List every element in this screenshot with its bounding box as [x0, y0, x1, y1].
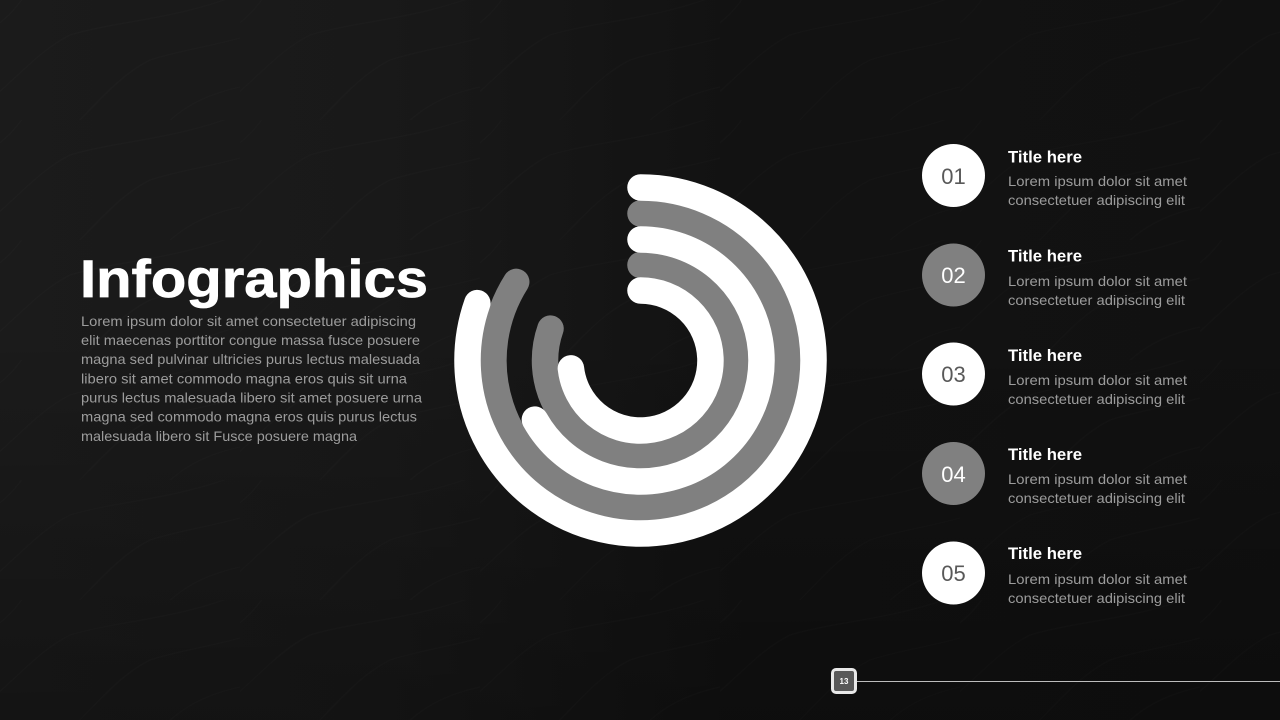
item title 03: Title here: [1008, 346, 1082, 365]
item text 01: Lorem ipsum dolor sit amet: [1008, 173, 1187, 189]
list item 05: [922, 542, 1187, 606]
item title 01: Title here: [1008, 148, 1082, 166]
number badge 01: 01: [941, 164, 966, 189]
item text 02: Lorem ipsum dolor sit amet: [1008, 273, 1187, 289]
text block: intro paragraph: elit maecenas porttitor congue massa fusce posuere: [81, 332, 420, 348]
number badge 05: [922, 542, 985, 604]
radial bar 03: [535, 240, 761, 482]
item text 01: [1008, 173, 1187, 208]
number badge 05: 05: [941, 561, 966, 586]
text block: intro paragraph: malesuada libero sit Fusce posuere magna: [81, 428, 357, 444]
number badge 03: [922, 342, 985, 406]
text block: intro paragraph: purus lectus malesuada libero sit amet posuere urna: [81, 390, 422, 406]
radial bar 05: [571, 290, 710, 430]
number badge 03: 03: [941, 362, 966, 387]
number badge 02: [922, 244, 985, 306]
item title 05: Title here: [1008, 544, 1082, 563]
number badge 01: [922, 144, 985, 207]
number badge 04: [922, 442, 985, 505]
list item 04: [922, 442, 1187, 506]
item title 02: Title here: [1008, 246, 1082, 266]
text block: intro paragraph: [81, 313, 422, 444]
radial bar 02: [493, 214, 787, 507]
radial bar 04: [545, 265, 736, 456]
chart: concentric radial bars: [467, 188, 814, 534]
title: Infographics: [80, 250, 428, 309]
radial bar 01: [467, 188, 814, 534]
item title 04: Title here: [1008, 445, 1082, 464]
item text 05: Lorem ipsum dolor sit amet: [1008, 571, 1187, 587]
number badge 02: 02: [941, 263, 966, 288]
item text 05: consectetuer adipiscing elit: [1008, 590, 1185, 606]
text block: intro paragraph: Lorem ipsum dolor sit amet consectetuer adipiscing: [81, 313, 416, 329]
number badge 04: 04: [941, 462, 966, 487]
item text 03: consectetuer adipiscing elit: [1008, 391, 1185, 407]
item text 03: [1008, 372, 1187, 407]
footer rule: [857, 681, 1280, 682]
item text 04: Lorem ipsum dolor sit amet: [1008, 471, 1187, 487]
page number badge: 13: [840, 677, 849, 686]
item text 05: [1008, 571, 1187, 606]
item text 02: consectetuer adipiscing elit: [1008, 292, 1185, 308]
text block: intro paragraph: libero sit amet commodo magna eros quis sit urna: [81, 370, 407, 386]
item text 03: Lorem ipsum dolor sit amet: [1008, 372, 1187, 388]
item text 01: consectetuer adipiscing elit: [1008, 192, 1185, 208]
item text 04: consectetuer adipiscing elit: [1008, 490, 1185, 506]
list item 03: [922, 342, 1187, 407]
text block: intro paragraph: magna sed pulvinar ultricies purus lectus malesuada: [81, 351, 420, 367]
item text 04: [1008, 471, 1187, 506]
item text 02: [1008, 273, 1187, 308]
page number badge: [832, 670, 856, 692]
list item 01: [922, 144, 1187, 208]
list item 02: [922, 244, 1187, 308]
text block: intro paragraph: magna sed commodo magna eros quis purus lectus: [81, 408, 417, 424]
